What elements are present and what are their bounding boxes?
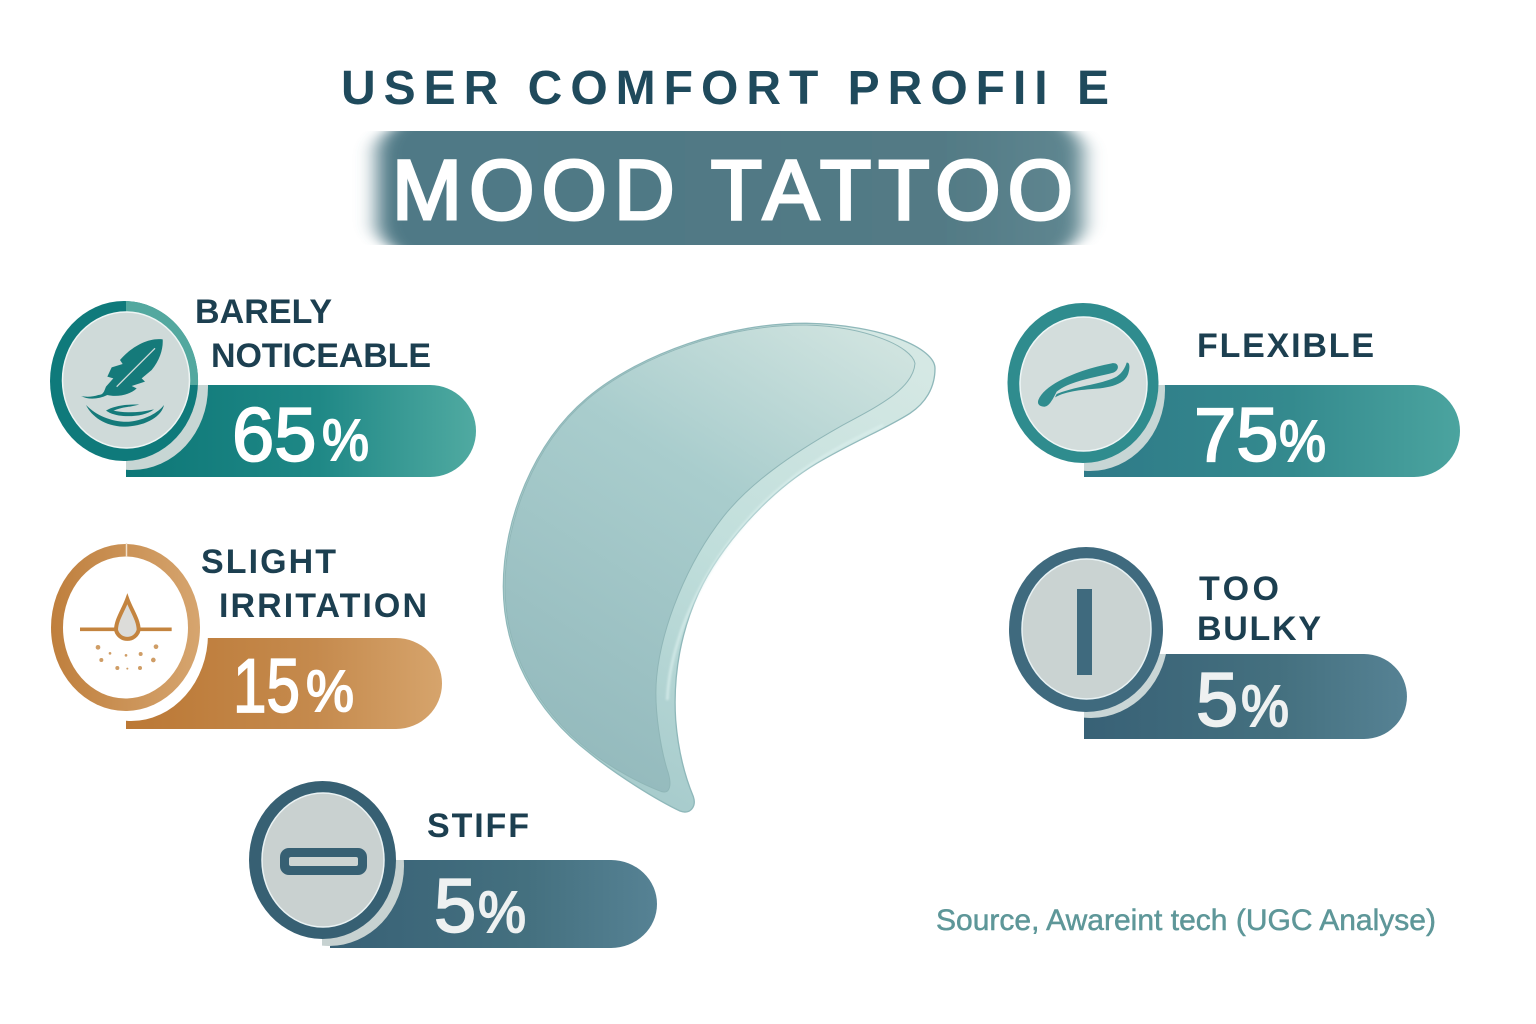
bar bbox=[1084, 654, 1407, 739]
value: % bbox=[306, 659, 354, 724]
icon: flexible strip bbox=[1038, 363, 1129, 407]
badge bbox=[249, 781, 404, 946]
label: BULKY bbox=[1197, 610, 1321, 648]
value bbox=[233, 644, 354, 729]
value: 5 bbox=[434, 864, 476, 949]
value: % bbox=[322, 408, 369, 473]
title banner: mood tattoo bbox=[377, 126, 1083, 250]
label: NOTICEABLE bbox=[211, 337, 431, 375]
badge bbox=[51, 543, 208, 721]
banner title text: MOOD TATTOO bbox=[392, 143, 1073, 237]
illustration: crescent mood tattoo patch bbox=[503, 323, 935, 812]
panel: stiff 5% bbox=[249, 781, 657, 949]
badge bbox=[50, 301, 208, 470]
bar bbox=[1084, 385, 1460, 477]
heading: user comfort profile: USER COMFORT PROFII E bbox=[341, 62, 1109, 115]
value bbox=[434, 864, 526, 949]
panel: barely noticeable 65% bbox=[50, 293, 476, 478]
value: 15 bbox=[233, 644, 300, 729]
bar bbox=[330, 860, 657, 948]
icon: droplet on skin bbox=[80, 599, 172, 670]
patch edge highlight bbox=[667, 425, 883, 700]
panel: slight irritation 15% bbox=[51, 543, 442, 729]
value: 75 bbox=[1194, 393, 1279, 478]
label: IRRITATION bbox=[219, 587, 427, 625]
panel: too bulky 5% bbox=[1009, 547, 1407, 743]
value: 5 bbox=[1196, 658, 1238, 743]
patch inner body bbox=[505, 325, 915, 792]
badge bbox=[1008, 303, 1165, 471]
banner background bbox=[377, 126, 1083, 250]
value: % bbox=[1279, 409, 1326, 474]
bar bbox=[126, 638, 442, 729]
bar bbox=[126, 385, 476, 477]
panel: flexible 75% bbox=[1008, 303, 1460, 478]
value bbox=[1194, 393, 1326, 478]
label: FLEXIBLE bbox=[1197, 327, 1374, 365]
value: % bbox=[478, 880, 526, 945]
source note: Source, Awareint tech (UGC Analyse) bbox=[936, 904, 1436, 937]
icon: bulky bar bbox=[1077, 589, 1092, 675]
value bbox=[232, 393, 369, 478]
value: % bbox=[1241, 674, 1289, 739]
value: 65 bbox=[232, 393, 317, 478]
value bbox=[1196, 658, 1289, 743]
icon: feather bbox=[81, 339, 164, 427]
label: TOO bbox=[1199, 570, 1279, 608]
label: STIFF bbox=[427, 807, 529, 845]
label: SLIGHT bbox=[201, 543, 336, 581]
badge bbox=[1009, 547, 1168, 718]
patch outer edge bbox=[503, 323, 935, 812]
label: BARELY bbox=[195, 293, 332, 331]
icon: stiff bar bbox=[280, 848, 367, 875]
